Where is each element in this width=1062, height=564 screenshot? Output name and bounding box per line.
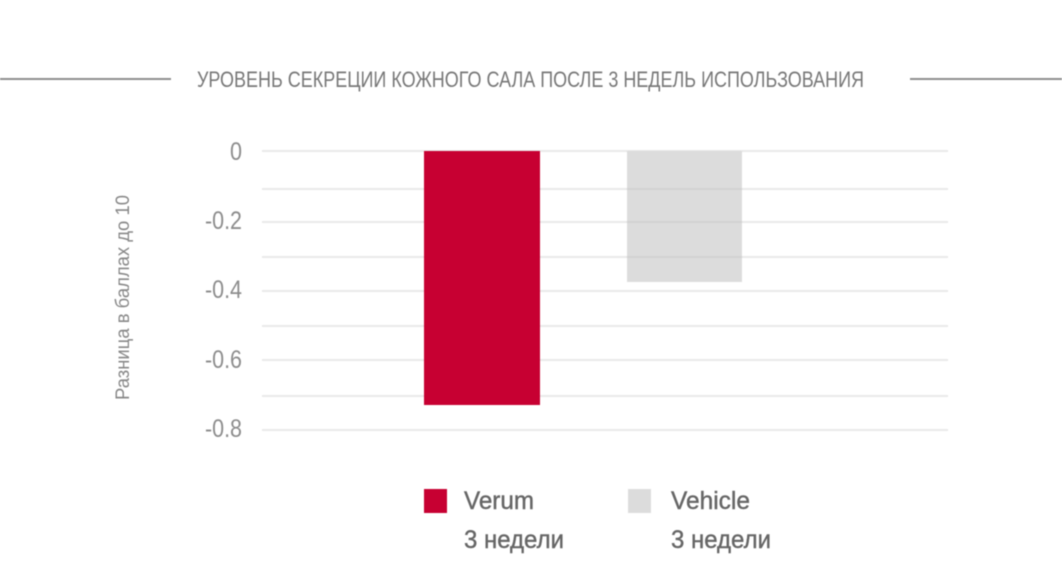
legend: Verum	[424, 487, 564, 554]
grid lines	[262, 150, 948, 431]
y axis labels: -0.8	[205, 415, 242, 443]
legend: Verum: 3 недели	[464, 526, 564, 554]
bar: Vehicle	[627, 151, 742, 282]
bar: Verum	[424, 151, 540, 405]
y axis labels: 0	[230, 138, 242, 166]
legend: Vehicle	[628, 487, 771, 554]
heading with side rules: УРОВЕНЬ СЕКРЕЦИИ КОЖНОГО САЛА ПОСЛЕ 3 НЕДЕЛЬ ИСПОЛЬЗОВАНИЯ	[197, 67, 864, 92]
y axis labels	[205, 138, 242, 443]
y axis labels: -0.4	[205, 276, 242, 304]
legend: Vehicle: 3 недели	[671, 526, 771, 554]
y axis title: Разница в баллах до 10	[113, 195, 134, 400]
legend: Verum: Verum	[464, 487, 534, 515]
y axis labels: -0.6	[205, 346, 242, 374]
legend: Vehicle: Vehicle	[671, 487, 750, 515]
y axis labels: -0.2	[205, 207, 242, 235]
